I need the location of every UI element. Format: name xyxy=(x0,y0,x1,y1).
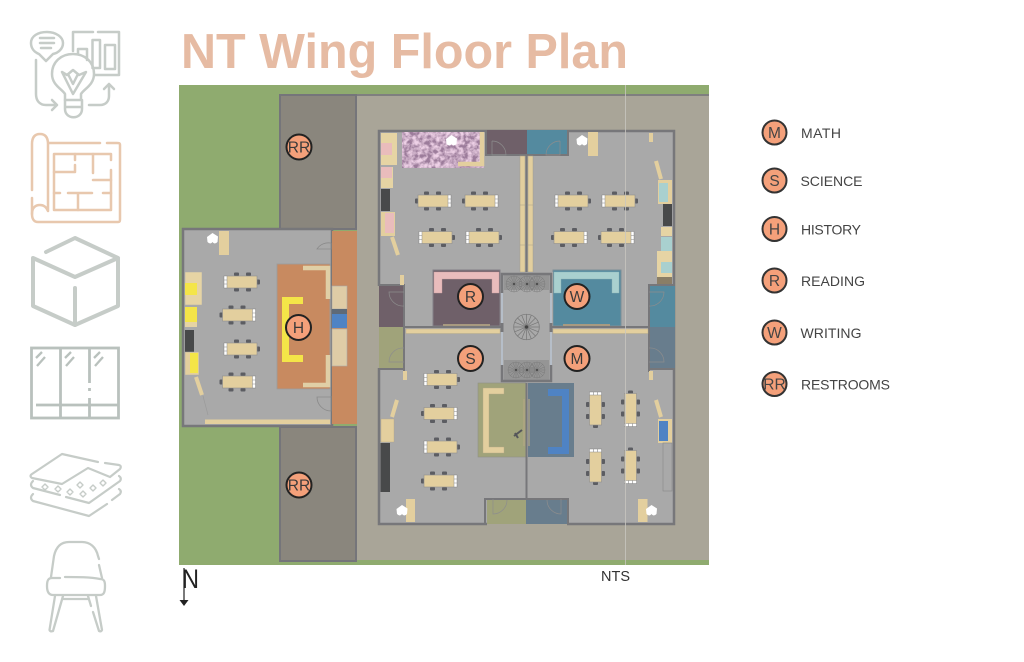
icon: blueprint xyxy=(32,134,120,222)
south west furniture xyxy=(380,371,415,522)
legend: science: S xyxy=(769,173,780,190)
center south wall xyxy=(526,383,528,499)
legend xyxy=(762,120,890,396)
west wall furniture north xyxy=(381,133,404,285)
marker: science xyxy=(458,346,483,371)
legend: writing: WRITING xyxy=(800,325,862,341)
history room xyxy=(183,229,357,426)
small figure xyxy=(514,430,522,438)
legend: restrooms: RESTROOMS xyxy=(801,376,890,392)
classroom tables xyxy=(415,192,640,490)
east closets xyxy=(649,285,675,372)
legend: science xyxy=(762,168,862,192)
history south shelves xyxy=(205,420,330,424)
reading alcove xyxy=(433,270,500,326)
survey seam line xyxy=(624,85,626,565)
legend: restrooms xyxy=(762,372,890,396)
legend: restrooms: RR xyxy=(763,376,786,394)
marker: restrooms south xyxy=(286,472,312,498)
legend: writing xyxy=(762,320,862,344)
history desk xyxy=(219,231,229,255)
legend: reading: R xyxy=(769,273,780,290)
legend: math: MATH xyxy=(801,125,841,141)
history rug xyxy=(277,264,330,389)
north restroom block xyxy=(280,94,709,229)
main building xyxy=(375,130,675,527)
central court xyxy=(501,272,553,382)
icon: chair south east xyxy=(646,505,657,516)
marker: reading xyxy=(458,284,483,309)
icon: chair south west xyxy=(396,505,408,516)
south restroom block xyxy=(280,427,356,561)
icon: flooring layers xyxy=(30,454,121,516)
floor plan xyxy=(179,85,709,565)
yellow sofa xyxy=(282,297,303,362)
marker: math xyxy=(564,346,590,371)
west closets xyxy=(375,285,404,372)
tan sofa xyxy=(483,388,504,453)
north arrow: N xyxy=(182,564,199,594)
title: NT Wing Floor Plan xyxy=(181,25,628,79)
marker: math: M xyxy=(571,351,583,368)
icon: window xyxy=(32,348,118,418)
site lawn xyxy=(179,85,709,565)
closets south xyxy=(485,499,568,527)
concrete surround xyxy=(357,96,709,560)
teal sofa xyxy=(554,272,619,293)
marker: restrooms south: RR xyxy=(288,478,310,494)
history rug shelves xyxy=(303,268,328,385)
icon: cube xyxy=(33,238,118,325)
history tables xyxy=(220,272,260,392)
legend: history xyxy=(762,217,862,241)
legend: science: SCIENCE xyxy=(800,173,862,189)
marker: writing: W xyxy=(570,289,585,306)
reading rug shelf xyxy=(458,132,482,164)
icon: teacher chair xyxy=(207,233,218,244)
south plantings xyxy=(508,362,545,378)
south east furniture xyxy=(638,371,672,522)
east wall furniture north xyxy=(649,133,672,284)
icon: chair north west xyxy=(446,135,457,146)
cross walls xyxy=(404,327,649,334)
writing alcove xyxy=(553,270,621,326)
slate rug xyxy=(528,383,574,457)
legend: reading: READING xyxy=(801,273,865,289)
central stair xyxy=(514,314,539,340)
pink sofa xyxy=(434,272,499,293)
marker: reading: R xyxy=(465,289,476,306)
marker: history: H xyxy=(293,320,304,337)
central partition shelves xyxy=(520,156,533,272)
history corridor casework xyxy=(332,286,347,366)
marker: science: S xyxy=(465,351,476,368)
marker: history xyxy=(286,315,311,340)
legend: history: HISTORY xyxy=(801,222,862,238)
marker: restrooms north: RR xyxy=(288,140,310,156)
icon: chair north east xyxy=(576,135,588,146)
blue sofa xyxy=(548,389,569,454)
marker: restrooms north xyxy=(286,134,312,160)
icon: chair xyxy=(47,542,105,631)
olive rug xyxy=(478,383,526,457)
closets north xyxy=(486,130,568,155)
icon: idea and data xyxy=(31,32,119,117)
marker: writing xyxy=(564,284,590,309)
north plantings xyxy=(506,276,545,292)
legend: math xyxy=(762,120,841,144)
history doors xyxy=(317,243,331,411)
door swings xyxy=(389,141,664,514)
center south shelves xyxy=(524,399,529,446)
purple rug xyxy=(402,132,484,168)
history corridor strip xyxy=(332,231,357,424)
history whiteboard and lockers xyxy=(185,272,208,415)
scale note: NTS xyxy=(601,569,630,585)
legend: history: H xyxy=(769,222,780,238)
legend: math: M xyxy=(768,125,781,142)
north east desk xyxy=(588,132,598,156)
north arrow xyxy=(180,564,199,606)
legend: reading xyxy=(762,268,865,292)
legend: writing: W xyxy=(767,325,782,342)
